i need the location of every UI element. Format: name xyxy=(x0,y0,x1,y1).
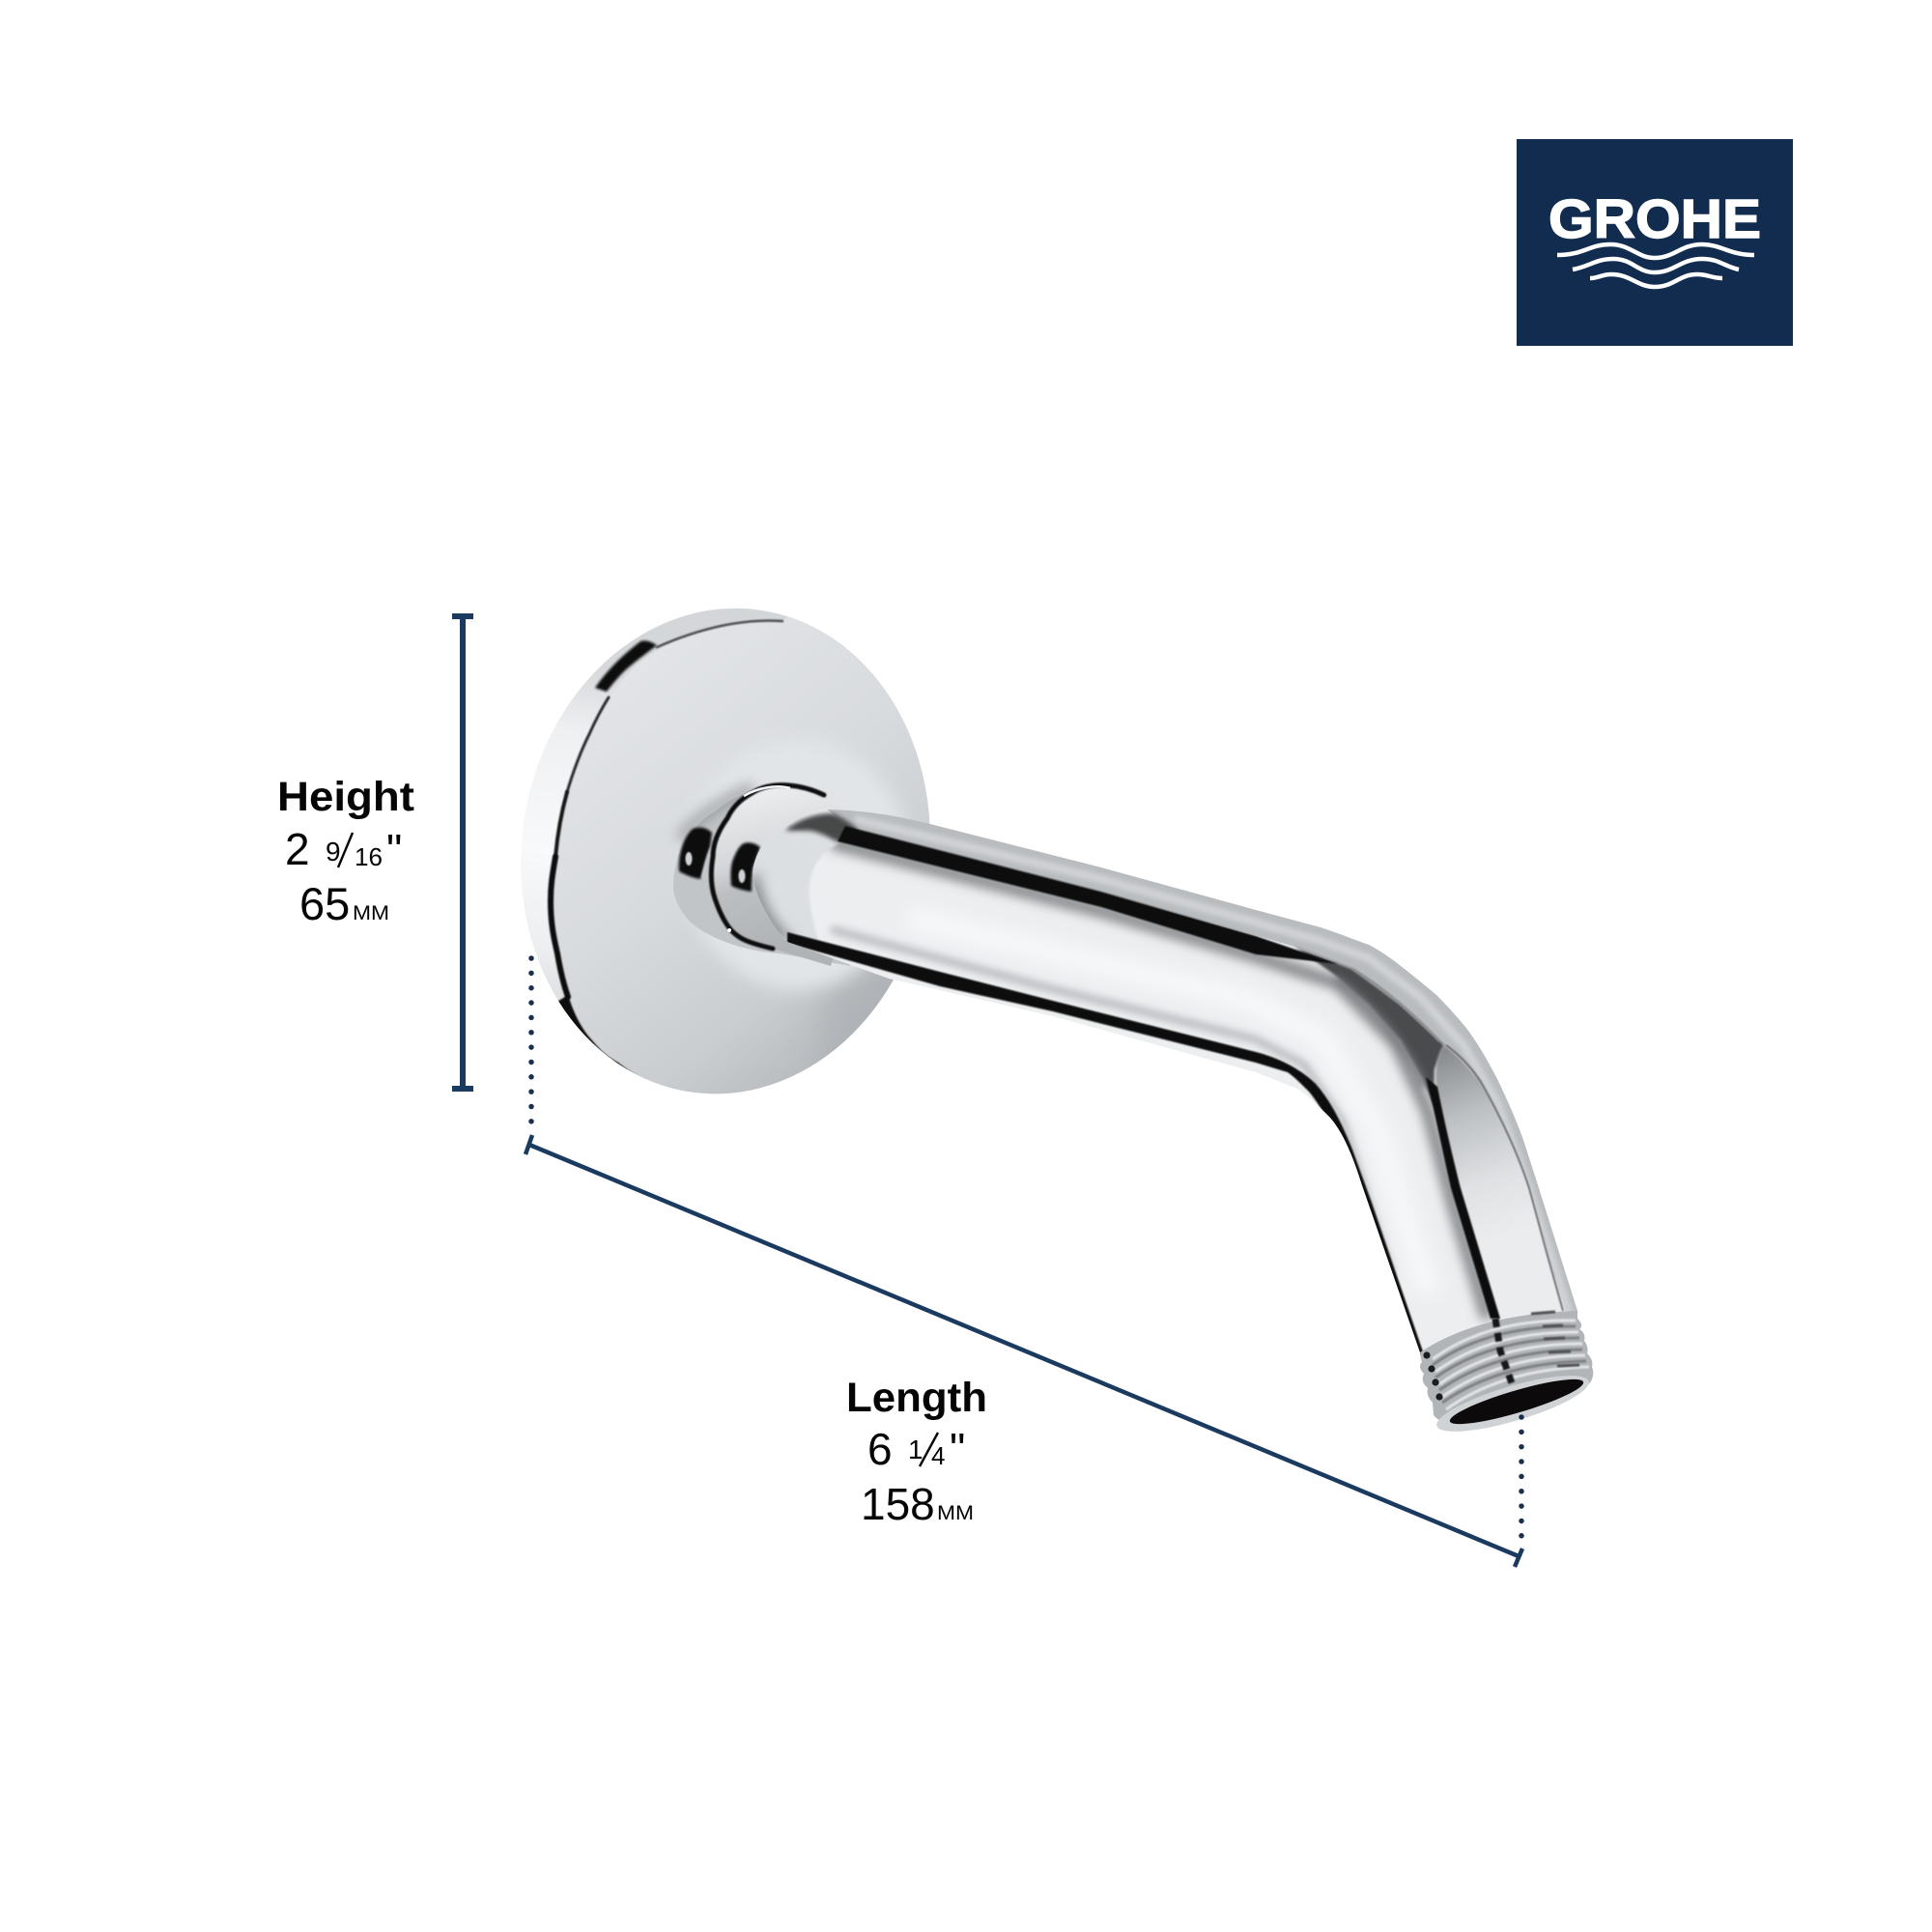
height label: Height xyxy=(277,774,414,820)
length label: 6 xyxy=(867,1424,893,1474)
lower black band xyxy=(787,932,1424,1354)
height label: MM xyxy=(353,902,389,924)
flange reflection top xyxy=(595,640,657,692)
length label: 1 xyxy=(908,1435,923,1464)
length label: " xyxy=(950,1424,965,1474)
length label: Length xyxy=(846,1375,987,1421)
length label: 158 xyxy=(861,1479,935,1529)
arm pipe xyxy=(753,810,1577,1362)
height label: 65 xyxy=(299,878,350,929)
length label xyxy=(846,1375,987,1529)
logo: GROHE xyxy=(1517,139,1793,346)
logo: GROHE: GROHE xyxy=(1548,188,1761,250)
height label xyxy=(277,774,414,929)
length label: MM xyxy=(937,1502,974,1524)
height label: 16 xyxy=(355,842,383,871)
collar xyxy=(673,785,869,966)
length label: 4 xyxy=(931,1441,945,1470)
height label: " xyxy=(386,825,402,875)
top dark patch xyxy=(785,813,858,842)
flange reflection bottom xyxy=(558,996,639,1076)
dimension: length line xyxy=(526,1135,1522,1567)
left end of pipe xyxy=(753,825,842,951)
dotted guide left xyxy=(528,958,534,1136)
threaded end xyxy=(1420,1311,1594,1442)
wall flange xyxy=(522,609,929,1094)
height label: 9 xyxy=(326,837,341,867)
pipe shading xyxy=(831,842,1488,1319)
pipe opening xyxy=(1432,1365,1594,1442)
height label: 2 xyxy=(285,824,310,874)
product: shower arm with flange xyxy=(490,582,1642,1442)
upper strip xyxy=(827,810,1577,1312)
dimension: height bar xyxy=(452,616,473,1089)
charcoal bend xyxy=(1294,947,1444,1106)
upper black band xyxy=(838,826,1338,964)
lobe xyxy=(1435,1045,1549,1309)
dotted guide right xyxy=(1519,1417,1524,1548)
lower-leg dark band xyxy=(1426,1077,1500,1319)
